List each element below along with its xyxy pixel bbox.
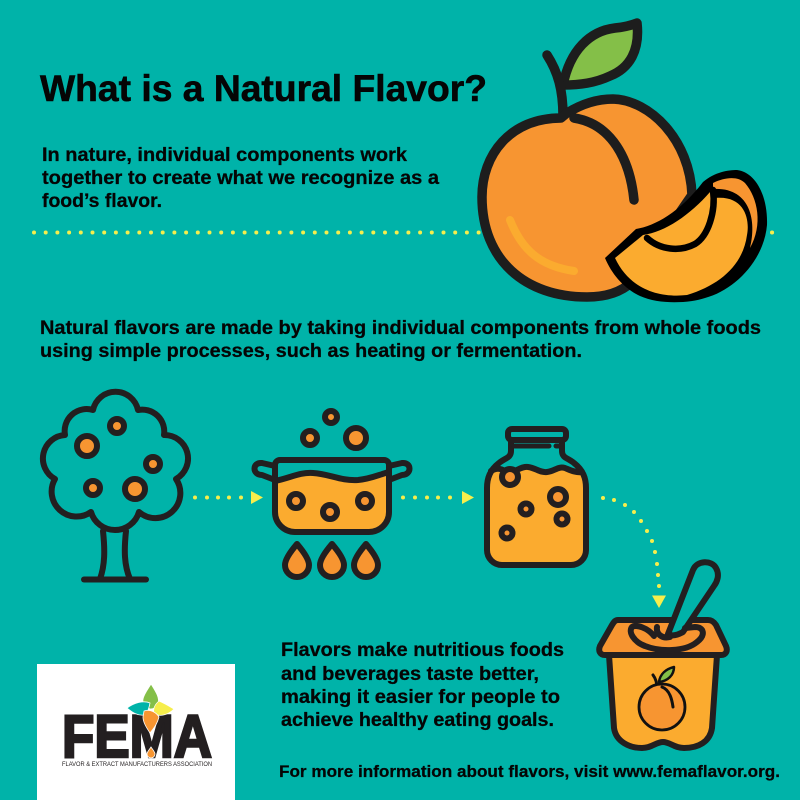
icon: fruit tree: [43, 392, 188, 580]
title: What is a Natural Flavor?: [40, 68, 487, 109]
dotted divider line: [34, 230, 772, 234]
logo wordmark: FEMA: [62, 703, 212, 770]
intro text: In nature, individual components work: [42, 145, 407, 166]
website footer text: For more information about flavors, visit www.femaflavor.org.: [279, 763, 780, 781]
arrow: tree to pot: [193, 491, 263, 504]
intro text: [42, 145, 439, 212]
closing text: [281, 640, 564, 731]
closing text: achieve healthy eating goals.: [281, 710, 554, 731]
intro text: food’s flavor.: [42, 191, 162, 212]
process description text: using simple processes, such as heating or fermentation.: [40, 340, 582, 362]
closing text: and beverages taste better,: [281, 664, 539, 685]
icon: yogurt cup with peach: [599, 562, 727, 748]
logo leaves: [127, 684, 174, 758]
closing text: making it easier for people to: [281, 687, 560, 708]
icon: jar of flavor: [487, 429, 586, 565]
process description text: Natural flavors are made by taking individual components from whole foods: [40, 317, 761, 339]
logo panel: FEMA: [37, 664, 235, 800]
intro text: together to create what we recognize as a: [42, 168, 439, 189]
logo tagline: FLAVOR & EXTRACT MANUFACTURERS ASSOCIATION: [62, 761, 212, 768]
arrow: jar to yogurt cup: [601, 496, 666, 608]
arrow: pot to jar: [401, 491, 474, 504]
process description text: [40, 317, 761, 362]
closing text: Flavors make nutritious foods: [281, 640, 564, 661]
icon: boiling pot over flames: [254, 411, 410, 577]
icon: peach with leaf and slice: [482, 23, 767, 302]
